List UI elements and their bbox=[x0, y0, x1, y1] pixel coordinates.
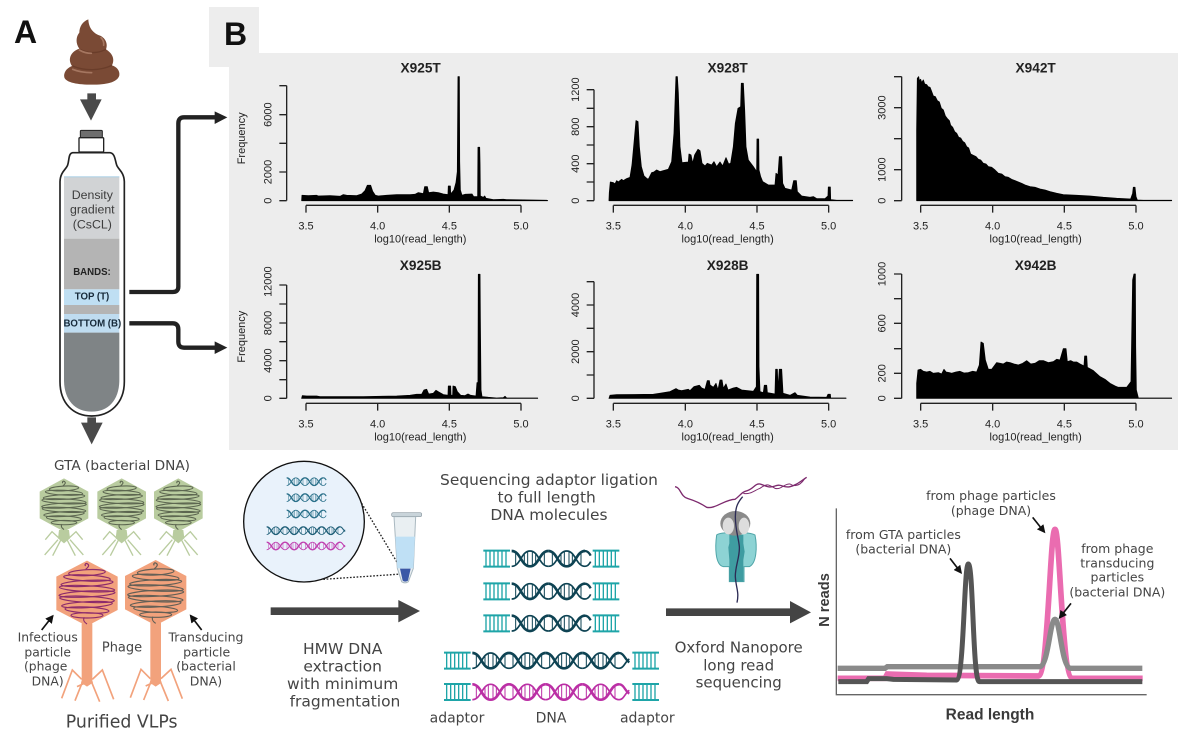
line: GTA bacterial DNA bbox=[838, 564, 1142, 682]
histogram X942B: 0 bbox=[877, 395, 889, 401]
histogram X942T: 3.5 bbox=[913, 221, 928, 233]
histogram X942B bbox=[877, 258, 1172, 444]
tube labels: BOTTOM (B) bbox=[63, 318, 121, 329]
icon: faecal sample bbox=[64, 19, 119, 85]
labels: adaptor and DNA bbox=[430, 710, 675, 726]
panel: DNA extraction and adaptor ligation bbox=[244, 461, 675, 726]
histogram X925B: X925B bbox=[400, 258, 442, 273]
histogram X925B: 4.5 bbox=[442, 418, 457, 430]
histogram X942B: 600 bbox=[877, 314, 889, 332]
histogram X942T: 4.0 bbox=[985, 221, 1000, 233]
histogram X942T: 0 bbox=[877, 198, 889, 204]
labels: adaptor and DNA: DNA bbox=[536, 710, 567, 726]
annotation: from GTA particles bbox=[846, 527, 961, 573]
tube labels: BANDS: bbox=[73, 267, 111, 278]
label: Oxford Nanopore: long read bbox=[703, 656, 774, 674]
annotation: from phage particles: from phage particles bbox=[926, 488, 1056, 503]
diagram: adapter-ligated DNA molecules bbox=[444, 551, 659, 700]
panel: purified virus-like particles bbox=[18, 458, 243, 732]
heading: adaptor ligation: DNA molecules bbox=[490, 506, 608, 524]
heading: GTA: GTA (bacterial DNA) bbox=[54, 458, 190, 474]
label: Oxford Nanopore bbox=[675, 639, 803, 692]
histogram X942T: X942T bbox=[1016, 60, 1056, 75]
callout: magnified DNA circle bbox=[244, 461, 364, 582]
heading: adaptor ligation bbox=[440, 471, 658, 524]
label: infectious particle bbox=[18, 631, 78, 688]
histogram X925T: 0 bbox=[262, 198, 274, 204]
histogram X942T bbox=[877, 60, 1172, 246]
arrow: tube to particles bbox=[81, 417, 103, 444]
histogram X928B: 5.0 bbox=[821, 418, 836, 430]
label: HMW DNA extraction: fragmentation bbox=[290, 693, 400, 711]
histogram X928B: 2000 bbox=[570, 339, 582, 364]
histogram X928T: log10(read_length) bbox=[682, 234, 774, 246]
label: transducing particle bbox=[167, 630, 243, 688]
icon: microcentrifuge tube bbox=[323, 503, 422, 583]
histogram X942B: 200 bbox=[877, 364, 889, 382]
label: HMW DNA extraction: extraction bbox=[303, 657, 382, 675]
label: transducing particle: particle bbox=[183, 644, 231, 659]
arrow: to infectious particle bbox=[42, 616, 53, 630]
label: transducing particle: DNA) bbox=[190, 673, 222, 688]
annotation: from phage transducing particles: (bacterial DNA) bbox=[1069, 584, 1165, 599]
panel B background bbox=[229, 53, 1178, 450]
histogram X925B: 3.5 bbox=[298, 418, 314, 430]
histogram X928B: 0 bbox=[570, 395, 582, 401]
histogram X928T: 4.5 bbox=[749, 221, 765, 233]
histogram X942B: 4.5 bbox=[1057, 418, 1072, 430]
histogram X925T: X925T bbox=[401, 60, 441, 75]
histogram X925B: 4.0 bbox=[370, 418, 385, 430]
panel: nanopore sequencing and read length plot bbox=[666, 477, 1165, 723]
histogram X928T: 800 bbox=[570, 118, 582, 136]
tube labels: TOP (T) bbox=[75, 292, 109, 303]
histogram X925B: 8000 bbox=[262, 311, 274, 335]
label: phage: Phage bbox=[102, 641, 142, 656]
label: infectious particle: Infectious bbox=[18, 631, 78, 645]
arrow: top band to top row histograms bbox=[129, 111, 227, 292]
histogram X925B: 0 bbox=[262, 395, 274, 401]
histogram X925T: 6000 bbox=[262, 102, 274, 127]
icon: GTA particle 1 bbox=[40, 478, 88, 556]
histogram X925T: Frequency bbox=[236, 112, 248, 164]
histogram X925B: 12000 bbox=[262, 266, 274, 297]
label: HMW DNA extraction: with minimum bbox=[287, 675, 398, 693]
label: infectious particle: DNA) bbox=[32, 674, 64, 688]
histogram X942B: 3.5 bbox=[913, 418, 928, 430]
annotation: from phage transducing particles: transducing bbox=[1080, 555, 1154, 570]
histogram X942T: 3000 bbox=[877, 95, 889, 120]
histogram X928T: 3.5 bbox=[606, 221, 621, 233]
histogram X928T: 5.0 bbox=[821, 221, 836, 233]
panel A workflow: sample to gradient bbox=[60, 19, 227, 444]
icon: GTA particle 2 bbox=[97, 478, 146, 556]
annotation: from phage particles: (phage DNA) bbox=[951, 503, 1031, 518]
label: transducing particle: Transducing bbox=[167, 630, 243, 645]
histogram X928T: 0 bbox=[570, 198, 582, 204]
annotation: from phage transducing particles bbox=[1060, 541, 1165, 618]
label: Oxford Nanopore: Oxford Nanopore bbox=[675, 639, 803, 657]
annotation: from phage particles bbox=[926, 488, 1056, 532]
heading: adaptor ligation: Sequencing adaptor ligation bbox=[440, 471, 658, 489]
label: transducing particle: (bacterial bbox=[176, 659, 236, 674]
arrow: to transducing particle bbox=[191, 616, 202, 630]
label: infectious particle: particle bbox=[24, 645, 71, 659]
histogram X928T: X928T bbox=[708, 60, 748, 75]
arrow: extraction step bbox=[271, 600, 420, 622]
chart: schematic read length distribution bbox=[836, 508, 1147, 695]
tube labels: (CsCL) bbox=[73, 217, 112, 231]
label: HMW DNA extraction: HMW DNA bbox=[303, 640, 383, 658]
histogram X925T: log10(read_length) bbox=[374, 234, 466, 246]
annotation: from GTA particles: from GTA particles bbox=[846, 527, 961, 542]
histogram X942T: 4.5 bbox=[1057, 221, 1072, 233]
annotation: from phage transducing particles: from phage bbox=[1081, 541, 1154, 556]
histogram X942T: 5.0 bbox=[1128, 221, 1144, 233]
histogram X925B bbox=[236, 258, 538, 444]
histogram X925T: 2000 bbox=[262, 160, 274, 184]
axis title: N reads: N reads bbox=[817, 573, 833, 627]
histogram X928T: 1200 bbox=[570, 77, 582, 102]
histogram X942B: 4.0 bbox=[985, 418, 1000, 430]
labels: adaptor and DNA: adaptor bbox=[620, 710, 675, 726]
annotation: from phage transducing particles: particles bbox=[1091, 570, 1144, 585]
histogram X942B: 5.0 bbox=[1128, 418, 1144, 430]
heading: adaptor ligation: to full length bbox=[498, 489, 596, 507]
panel A label: A bbox=[14, 14, 37, 50]
histogram X928B: log10(read_length) bbox=[682, 432, 774, 444]
histogram X925B: log10(read_length) bbox=[374, 432, 466, 444]
gradient layers bbox=[64, 176, 119, 412]
icon: transducing phage particle bbox=[125, 560, 186, 701]
histogram X928B: 4.5 bbox=[749, 418, 765, 430]
annotation: from GTA particles: (bacterial DNA) bbox=[855, 542, 951, 557]
histogram X928T: 4.0 bbox=[678, 221, 693, 233]
label: infectious particle: (phage bbox=[24, 660, 67, 674]
line: transduced bacterial DNA bbox=[838, 619, 1142, 668]
histogram X942T: log10(read_length) bbox=[990, 234, 1082, 246]
histogram X942B: log10(read_length) bbox=[990, 432, 1082, 444]
icon: nanopore bbox=[675, 477, 807, 603]
tube labels bbox=[63, 188, 121, 329]
histogram X928T bbox=[570, 60, 853, 246]
histogram X942T: 1000 bbox=[877, 157, 889, 182]
label: HMW DNA extraction bbox=[287, 640, 400, 711]
tube labels: gradient bbox=[70, 203, 115, 217]
histogram X928B: 4.0 bbox=[678, 418, 693, 430]
heading: purified VLPs: Purified VLPs bbox=[66, 712, 178, 732]
histogram X925T: 4.0 bbox=[370, 221, 385, 233]
panel B label: B bbox=[224, 16, 247, 52]
icon: GTA particle 3 bbox=[154, 478, 203, 556]
histogram X942B: X942B bbox=[1015, 258, 1057, 273]
histogram X928B: 3.5 bbox=[606, 418, 621, 430]
axis title: read length: Read length bbox=[946, 706, 1034, 723]
histogram X942B: 1000 bbox=[877, 262, 889, 286]
histogram X925B: Frequency bbox=[236, 310, 248, 363]
histogram X928T: 400 bbox=[570, 155, 582, 173]
icon: infectious phage particle bbox=[56, 561, 118, 702]
icon: centrifuge tube with density gradient bbox=[60, 130, 124, 416]
histogram X925B: 5.0 bbox=[513, 418, 529, 430]
arrow: sample to tube bbox=[80, 93, 102, 121]
arrow: bottom band to bottom row histograms bbox=[129, 323, 227, 354]
tube labels: Density bbox=[72, 188, 114, 202]
axes bbox=[836, 508, 1147, 695]
panel B tab background bbox=[209, 7, 259, 67]
histogram X928B: X928B bbox=[707, 258, 749, 273]
histogram X925T: 5.0 bbox=[513, 221, 529, 233]
histogram X928B bbox=[570, 258, 846, 444]
histogram X925B: 4000 bbox=[262, 348, 274, 373]
arrow: sequencing step bbox=[666, 601, 811, 623]
histogram X925T bbox=[236, 60, 548, 246]
label: Oxford Nanopore: sequencing bbox=[696, 674, 782, 692]
labels: adaptor and DNA: adaptor bbox=[430, 710, 485, 726]
histogram X925T: 3.5 bbox=[298, 221, 314, 233]
histogram X925T: 4.5 bbox=[442, 221, 457, 233]
histogram X928B: 4000 bbox=[570, 293, 582, 317]
line: phage DNA bbox=[838, 529, 1143, 678]
